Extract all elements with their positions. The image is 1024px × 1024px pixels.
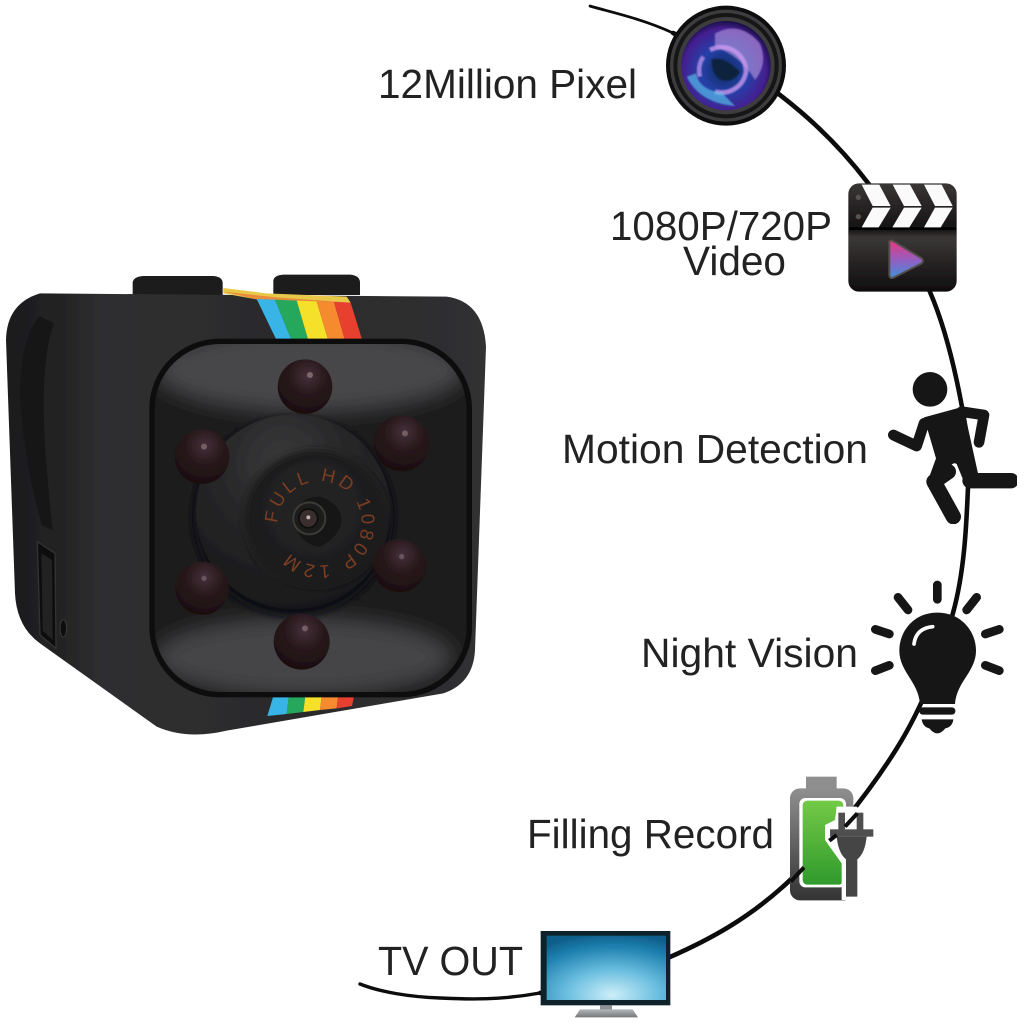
front recess panel bbox=[153, 327, 467, 697]
icon: camera lens bbox=[666, 6, 786, 126]
plug bbox=[830, 813, 873, 897]
icon: running person bbox=[893, 372, 1011, 517]
label: 1080P/720P Video: 1080P/720P bbox=[610, 203, 832, 249]
label: Motion Detection: Motion Detection bbox=[562, 426, 868, 472]
label: Filling Record: Filling Record bbox=[527, 811, 774, 857]
icon: video clapperboard bbox=[848, 183, 957, 292]
icon: tv monitor bbox=[541, 931, 670, 1017]
clapper stripes bbox=[862, 185, 953, 227]
hub shadow bbox=[193, 417, 393, 617]
front recess rim bbox=[149, 339, 472, 697]
reset hole bbox=[60, 620, 67, 637]
infrared led upper right bbox=[374, 415, 430, 471]
label: TV OUT: TV OUT bbox=[378, 938, 523, 984]
cable over plug bbox=[791, 813, 857, 882]
light rays bbox=[875, 585, 999, 671]
label: 12Million Pixel: 12Million Pixel bbox=[378, 61, 637, 107]
side slot bbox=[20, 316, 54, 530]
icon: battery charging bbox=[790, 777, 877, 900]
label: 1080P/720P Video bbox=[610, 203, 832, 284]
infrared led top bbox=[278, 359, 332, 414]
label: 1080P/720P Video: Video bbox=[683, 238, 786, 284]
lens hub bbox=[196, 414, 391, 609]
infrared led upper left bbox=[175, 429, 229, 484]
printed disc bbox=[257, 458, 381, 582]
play triangle bbox=[889, 240, 923, 278]
bottom rainbow stripe bbox=[267, 683, 357, 716]
infrared led bottom bbox=[274, 614, 330, 670]
infrared led lower left bbox=[175, 562, 229, 615]
top buttons bbox=[133, 275, 360, 297]
label: Night Vision: Night Vision bbox=[641, 630, 858, 676]
camera product photo bbox=[6, 274, 486, 734]
lens bbox=[293, 502, 325, 534]
usb port bbox=[37, 542, 56, 648]
printed lens text: FULL HD 1080P 12M bbox=[264, 468, 374, 578]
connecting curve bbox=[360, 6, 969, 999]
infrared led lower right bbox=[373, 539, 426, 592]
icon: light bulb bbox=[875, 585, 999, 733]
lens surround bbox=[295, 497, 342, 547]
top rainbow stripe bbox=[223, 288, 362, 340]
hub inner ledge bbox=[244, 450, 386, 587]
camera body bbox=[6, 293, 486, 735]
